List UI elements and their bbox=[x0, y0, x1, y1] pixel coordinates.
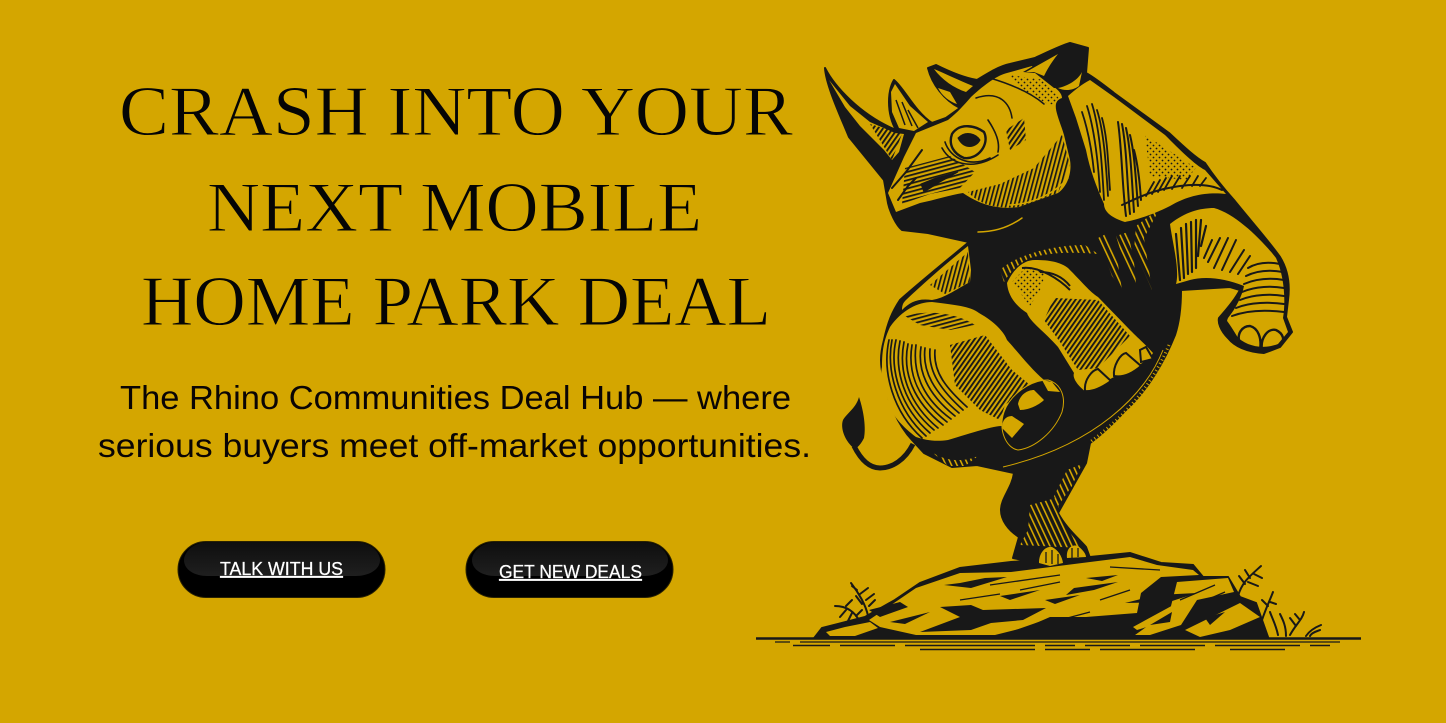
horns and left ear bbox=[829, 69, 973, 160]
head detail lines bbox=[892, 78, 1068, 232]
button: get new deals: GET NEW DEALS bbox=[499, 562, 642, 582]
ground line bbox=[756, 638, 1361, 650]
raised front leg bbox=[1007, 260, 1153, 392]
mid skin folds bbox=[1098, 208, 1160, 290]
illustration: rhino on rock bbox=[756, 43, 1361, 650]
torso left flank bbox=[902, 246, 971, 310]
right arm hatching bbox=[1176, 220, 1284, 350]
rock cracks bbox=[869, 575, 1225, 632]
title: NEXT MOBILE bbox=[207, 169, 702, 247]
subtitle bbox=[98, 379, 811, 464]
subtitle: serious buyers meet off-market opportunities. bbox=[98, 427, 811, 464]
subtitle: The Rhino Communities Deal Hub — where bbox=[120, 379, 791, 416]
belly highlight band bbox=[1000, 245, 1098, 282]
back and shoulder bbox=[1068, 80, 1226, 222]
rhino silhouette bbox=[825, 43, 1292, 566]
haunch hatching bbox=[887, 313, 1030, 438]
haunch bbox=[881, 302, 1044, 441]
head bbox=[888, 66, 1070, 212]
head shading bbox=[902, 75, 1070, 208]
body rim highlight bbox=[1003, 345, 1169, 467]
back hatching bbox=[1082, 104, 1222, 216]
back stipple bbox=[1145, 135, 1196, 180]
front leg toes bbox=[1085, 347, 1153, 391]
rock bbox=[815, 553, 1268, 637]
front leg hatching bbox=[1012, 268, 1130, 370]
button: get new deals bbox=[466, 542, 673, 598]
rock highlights bbox=[826, 557, 1260, 637]
right ear bbox=[1023, 45, 1088, 90]
grass bbox=[835, 566, 1321, 636]
rock grain lines bbox=[960, 567, 1225, 620]
title bbox=[119, 73, 794, 341]
right arm bbox=[1170, 208, 1288, 347]
standing leg detail bbox=[1020, 464, 1086, 566]
button: talk with us: TALK WITH US bbox=[220, 559, 343, 579]
button: talk with us bbox=[178, 542, 385, 598]
title: CRASH INTO YOUR bbox=[119, 73, 794, 151]
lower belly crescent bbox=[932, 452, 978, 466]
tail bbox=[842, 397, 913, 468]
rear foot bbox=[1002, 380, 1063, 450]
title: HOME PARK DEAL bbox=[141, 263, 771, 341]
